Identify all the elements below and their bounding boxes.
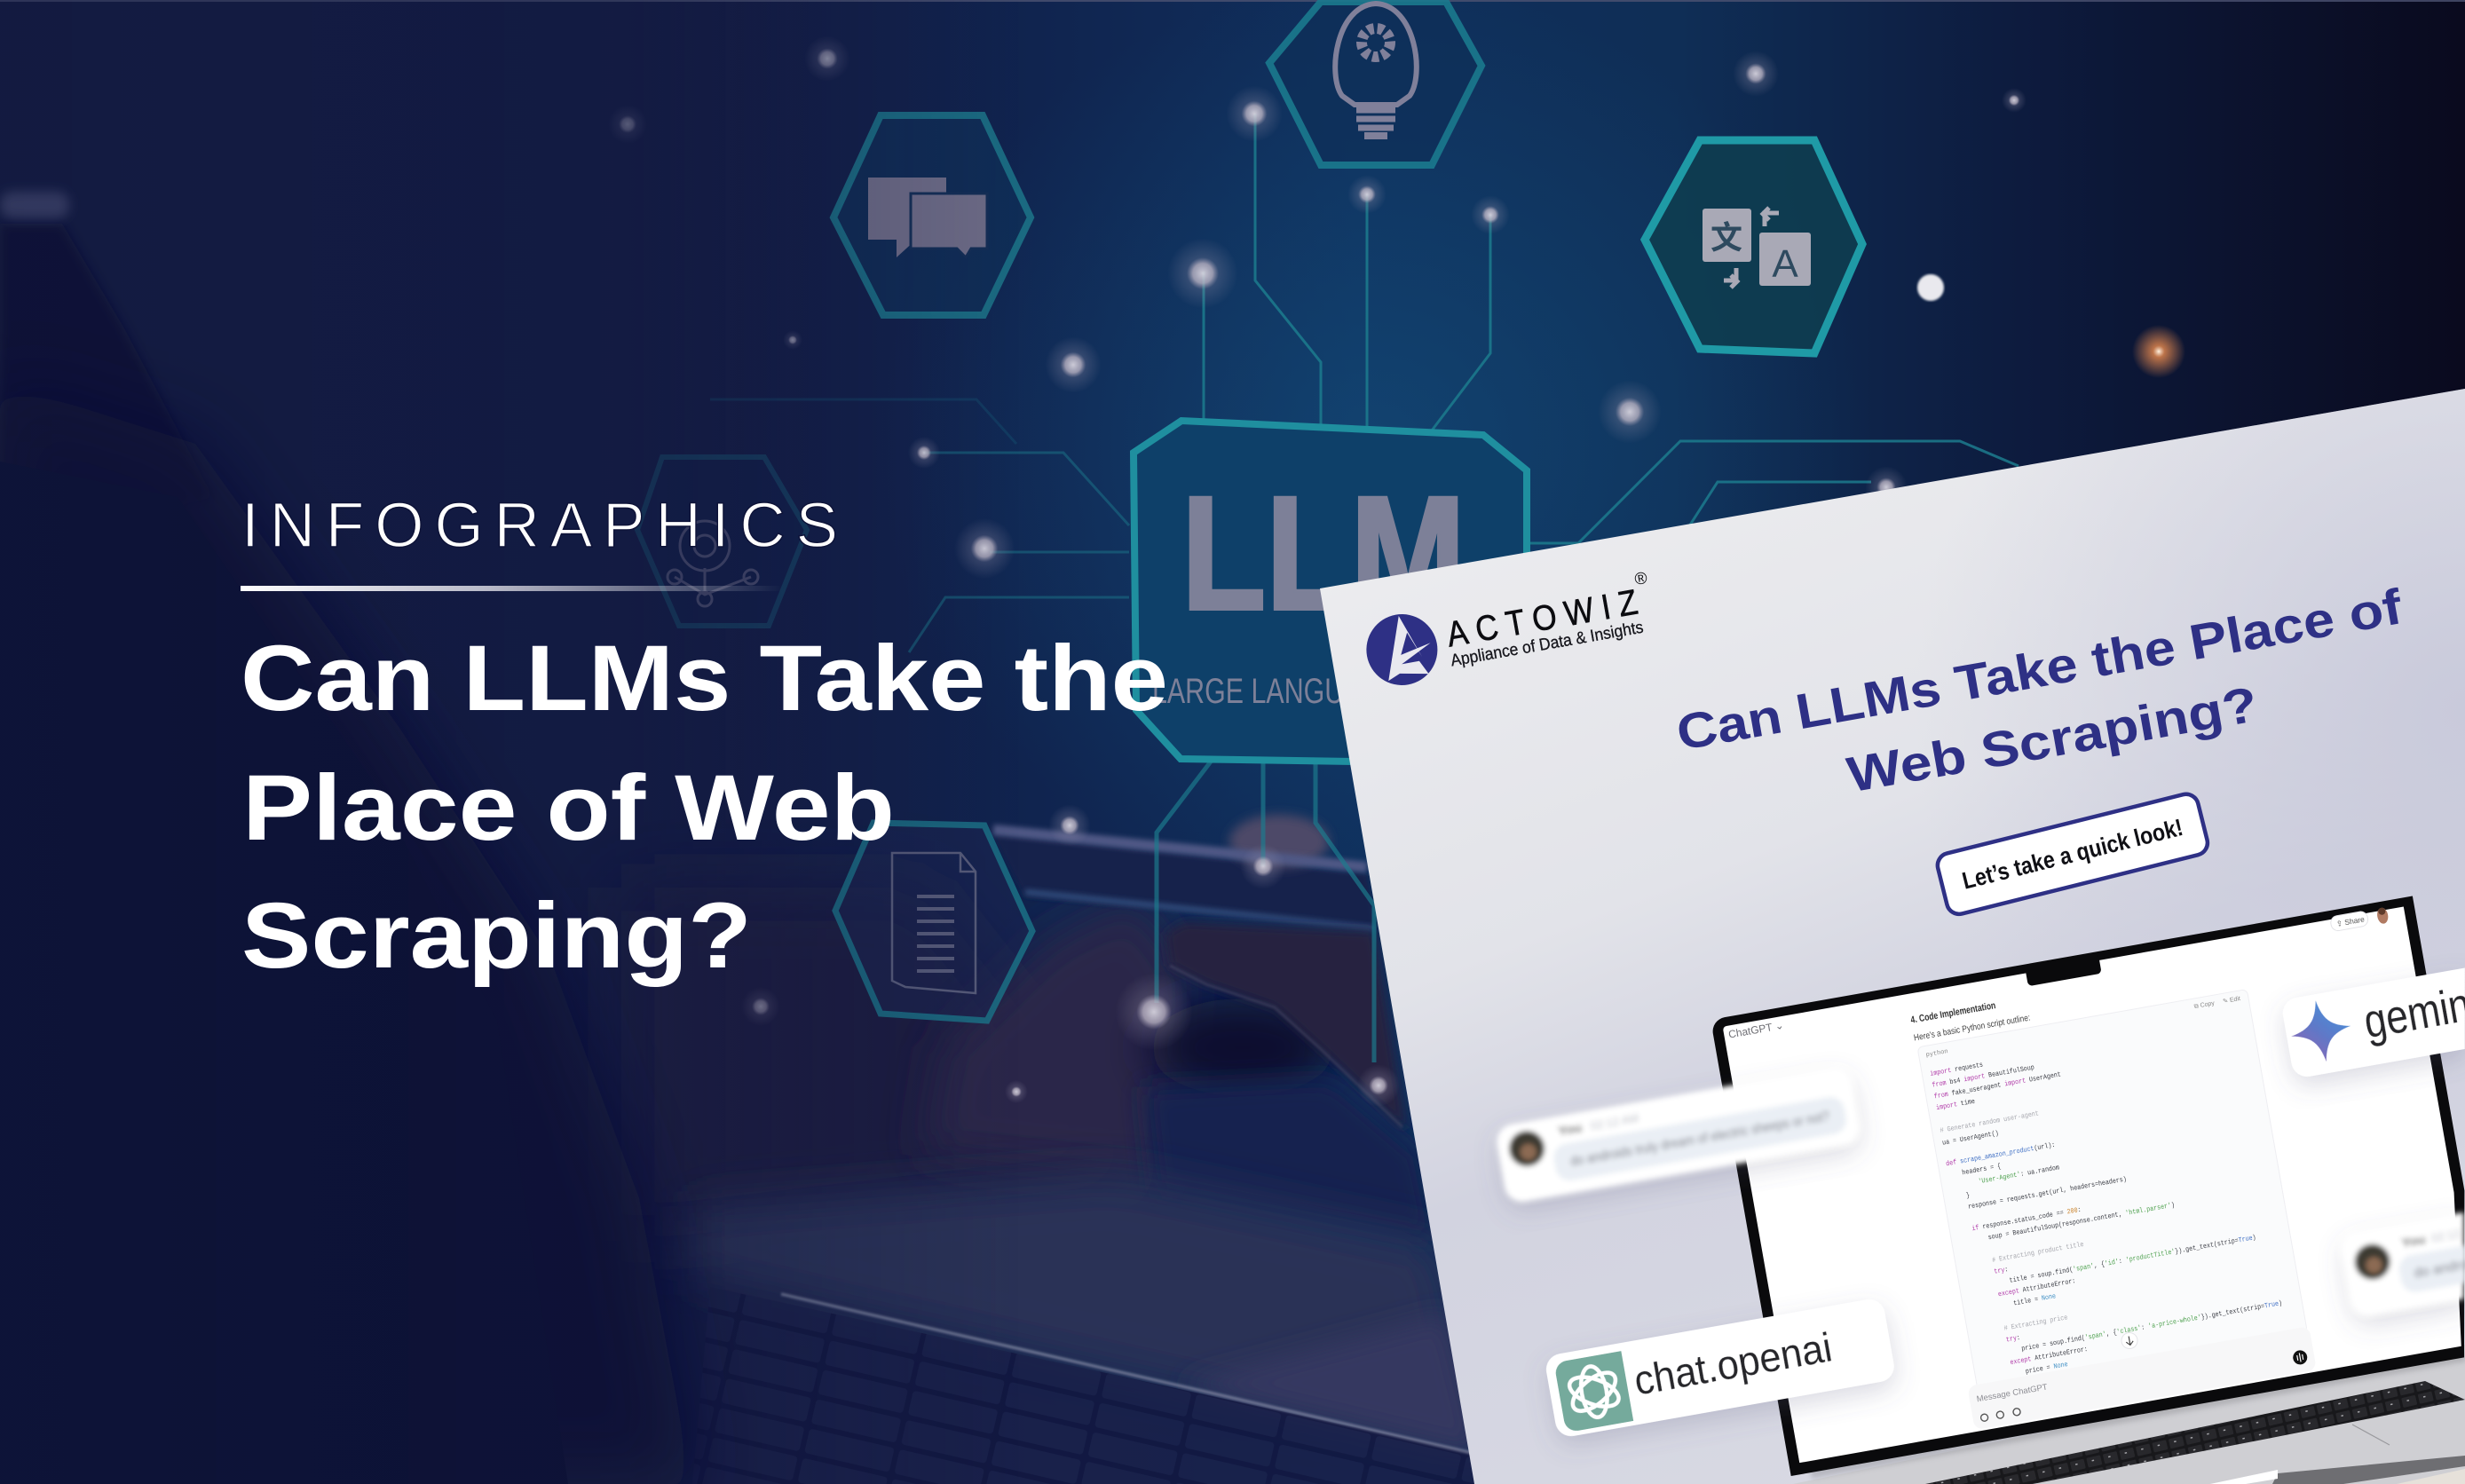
chat bubble: left blurred: do androids truly dream of electric sheeps or not? [1569, 1109, 1831, 1170]
code block: } [1965, 1192, 1971, 1200]
main heading: Can LLMs Take the [241, 627, 1168, 730]
laptop deck [1793, 1345, 2465, 1484]
laptop screen [1723, 906, 2465, 1463]
code block: response = requests.get(url, headers=headers) [1968, 1176, 2128, 1212]
icon: translate: 文 [1710, 219, 1742, 256]
message box: Message ChatGPT [1976, 1382, 2049, 1404]
code block: # Extracting price [2003, 1314, 2068, 1333]
icon: chat bubbles [868, 178, 987, 257]
code block: except AttributeError: [2010, 1346, 2089, 1367]
code block: try: [2005, 1334, 2021, 1345]
code block: headers = { [1962, 1163, 2002, 1178]
chat bubble: left blurred: You [1557, 1120, 1584, 1140]
blurred photo of hands on a laptop [621, 815, 1487, 1484]
left fade overlay [0, 0, 1021, 1484]
code block: soup = BeautifulSoup(response.content, 'html.parser') [1987, 1202, 2176, 1243]
divider under the label [241, 586, 782, 591]
icon: light bulb with gear [1335, 4, 1417, 136]
badge: chat.openai: chat.openai [1631, 1323, 1836, 1404]
code block: from fake_useragent import UserAgent [1933, 1071, 2062, 1101]
icon: network [668, 521, 758, 606]
button: quick look [1935, 792, 2210, 917]
code block [1917, 990, 2307, 1390]
card title: Web Scraping? [1843, 675, 2262, 802]
code block: title = None [2013, 1293, 2057, 1308]
hexagon: translate [1645, 140, 1862, 353]
code block: # Generate random user-agent [1940, 1110, 2040, 1135]
code block: if response.status_code == 200: [1971, 1206, 2082, 1234]
soft highlight on shoulder [0, 192, 69, 218]
main heading [241, 627, 1168, 988]
code block: ✎ Edit [2223, 996, 2241, 1005]
chat bubble: left blurred [1494, 1065, 1862, 1204]
panel: tilted infographic preview card [1361, 439, 2465, 1484]
logo: Actowiz: ACTOWIZ [1443, 581, 1640, 654]
code block: import time [1936, 1098, 1976, 1113]
hexagon: idea bulb [1269, 2, 1481, 165]
icon: openai tile [1554, 1351, 1633, 1433]
keyboard [1925, 1381, 2465, 1484]
icon: gemini star [2286, 995, 2356, 1067]
code block: # Extracting product title [1992, 1241, 2084, 1265]
code block: try: [1994, 1267, 2009, 1276]
code block: def scrape_amazon_product(url): [1946, 1141, 2056, 1169]
chip title: LLM [1181, 462, 1466, 643]
laptop screen group [1710, 896, 2465, 1476]
badge: chat.openai [1544, 1297, 1897, 1439]
notch [2025, 954, 2102, 986]
badge: gemini [2280, 967, 2465, 1079]
main heading: Scraping? [241, 884, 752, 988]
icon: document [892, 853, 976, 993]
traces connecting the LLM chip [710, 114, 2019, 1062]
hexagon: brain network [637, 457, 807, 626]
message box [1963, 1302, 2317, 1430]
icon: logo circle [1361, 609, 1443, 691]
code block: python [1925, 1048, 1948, 1059]
glowing circuit nodes [608, 36, 2185, 1107]
trackpad edge [2352, 1425, 2390, 1445]
chat bubble: right blurred [2339, 1210, 2465, 1318]
share button and avatar [2330, 907, 2390, 933]
panel: card background [1320, 389, 2465, 1484]
hexagon: document [835, 823, 1032, 1021]
code block: price = soup.find('span', {'class': 'a-price-whole'}).get_text(strip=True) [2021, 1300, 2283, 1354]
laptop screen frame [1710, 896, 2465, 1476]
code block: price = None [2025, 1362, 2068, 1377]
code block: import requests [1930, 1062, 1984, 1078]
card title: Can LLMs Take the Place of [1672, 578, 2406, 761]
card title [1672, 578, 2419, 831]
app label: ChatGPT ⌄ [1727, 1019, 1785, 1041]
LLM chip [1134, 421, 1527, 763]
response heading: 4. Code Implementation [1910, 1000, 1996, 1026]
label: INFOGRAPHICS: INFOGRAPHICS [241, 491, 838, 561]
code block: except AttributeError: [1997, 1278, 2076, 1299]
code block: title = soup.find('span', {'id': 'productTitle'}).get_text(strip=True) [2009, 1235, 2256, 1285]
main heading: Place of Web [242, 756, 895, 860]
button: quick look: Let’s take a quick look! [1960, 814, 2185, 895]
hexagon: chat [834, 115, 1031, 315]
front edge of the laptop [2272, 1456, 2465, 1484]
icon: translate: A [1772, 242, 1798, 286]
share button and avatar: ⇪ Share [2335, 914, 2366, 928]
code block: ⧉ Copy [2193, 1000, 2216, 1010]
chip subtitle: LARGE LANGUAGE MODEL [1152, 672, 1505, 711]
chat bubble: left blurred: 02:12 AM [1590, 1111, 1639, 1133]
chat bubble: right blurred: 02:12 [2430, 1227, 2461, 1245]
logo: Actowiz [1361, 569, 1658, 691]
logo: Actowiz: ® [1633, 569, 1648, 589]
response intro: Here's a basic Python script outline: [1913, 1013, 2031, 1043]
logo: Actowiz: Appliance of Data & Insights [1450, 619, 1645, 670]
chat bubble: right blurred: You [2400, 1232, 2427, 1251]
code block: ua = UserAgent() [1942, 1130, 2000, 1148]
icon: translate [1703, 208, 1811, 288]
dark silhouette at the left [0, 224, 692, 1484]
code block: 'User-Agent': ua.random [1978, 1164, 2060, 1187]
code block: from bs4 import BeautifulSoup [1932, 1064, 2035, 1090]
